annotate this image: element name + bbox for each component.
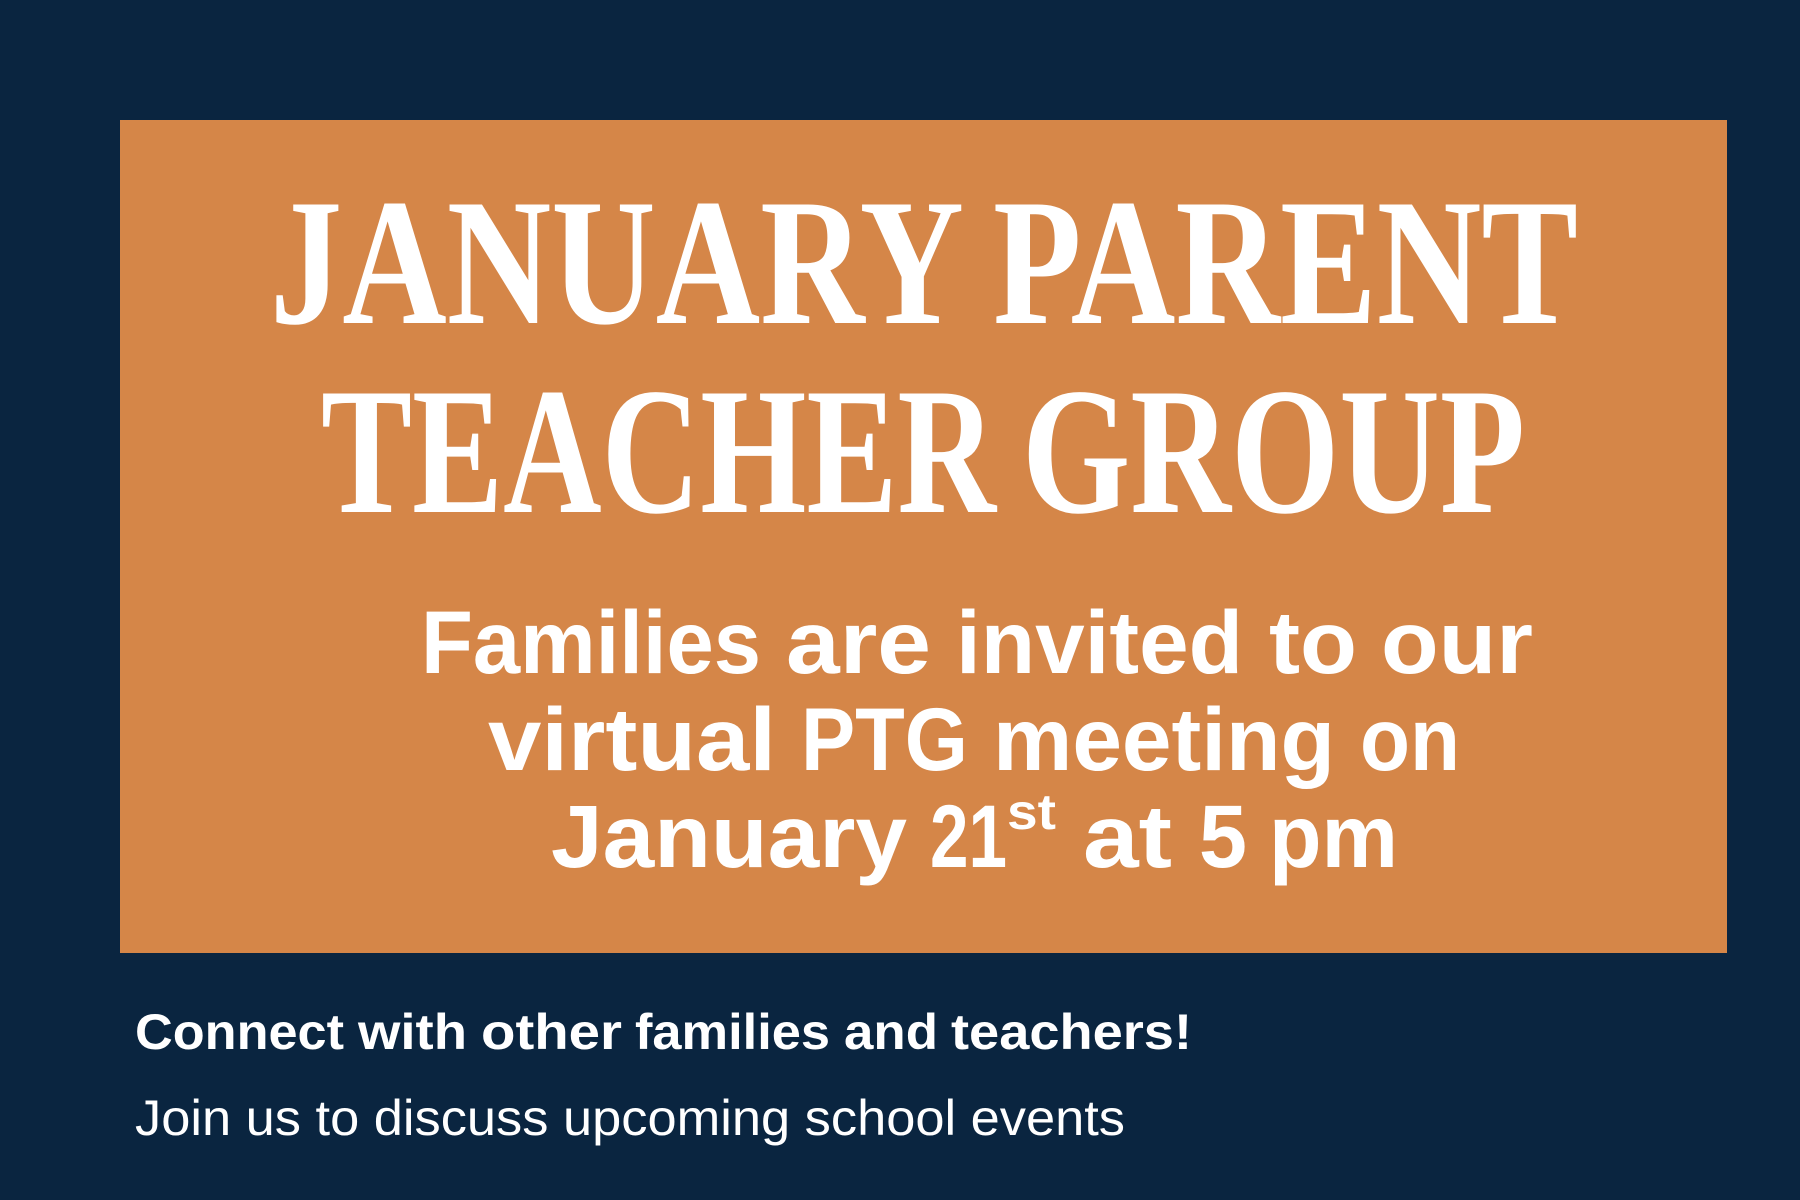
- footer: connect heading: other: [481, 1004, 622, 1060]
- invitation text: our: [1381, 592, 1533, 692]
- invitation text: [421, 592, 1533, 886]
- footer: connect heading: families: [635, 1004, 830, 1060]
- footer: connect heading: teachers!: [951, 1004, 1192, 1060]
- invitation text: on: [1360, 689, 1460, 789]
- invitation text: pm: [1269, 786, 1398, 886]
- invitation text: Families: [421, 592, 761, 692]
- title: PARENT: [993, 163, 1578, 363]
- invitation text: 21: [930, 786, 1007, 886]
- footer: connect heading: Connect: [135, 1004, 344, 1060]
- invitation text: January: [551, 786, 908, 886]
- panel: orange announcement: [120, 120, 1727, 953]
- footer: connect heading: with: [357, 1004, 467, 1060]
- title: [270, 163, 1578, 552]
- invitation text: at: [1083, 786, 1172, 886]
- invitation text: invited: [956, 592, 1243, 692]
- invitation text: virtual: [488, 689, 776, 789]
- footer: connect heading: and: [844, 1004, 938, 1060]
- title: TEACHER: [321, 352, 998, 552]
- invitation text: meeting: [993, 689, 1335, 789]
- title: GROUP: [1022, 352, 1525, 552]
- invitation text: st: [1007, 784, 1056, 840]
- invitation text: are: [786, 592, 931, 692]
- invitation text: 5: [1199, 786, 1247, 886]
- invitation text: PTG: [801, 689, 968, 789]
- invitation text: to: [1269, 592, 1357, 692]
- footer: join text: Join us to discuss upcoming school events: [135, 1090, 1125, 1146]
- footer: connect heading: [135, 1004, 1192, 1060]
- title: JANUARY: [270, 163, 964, 363]
